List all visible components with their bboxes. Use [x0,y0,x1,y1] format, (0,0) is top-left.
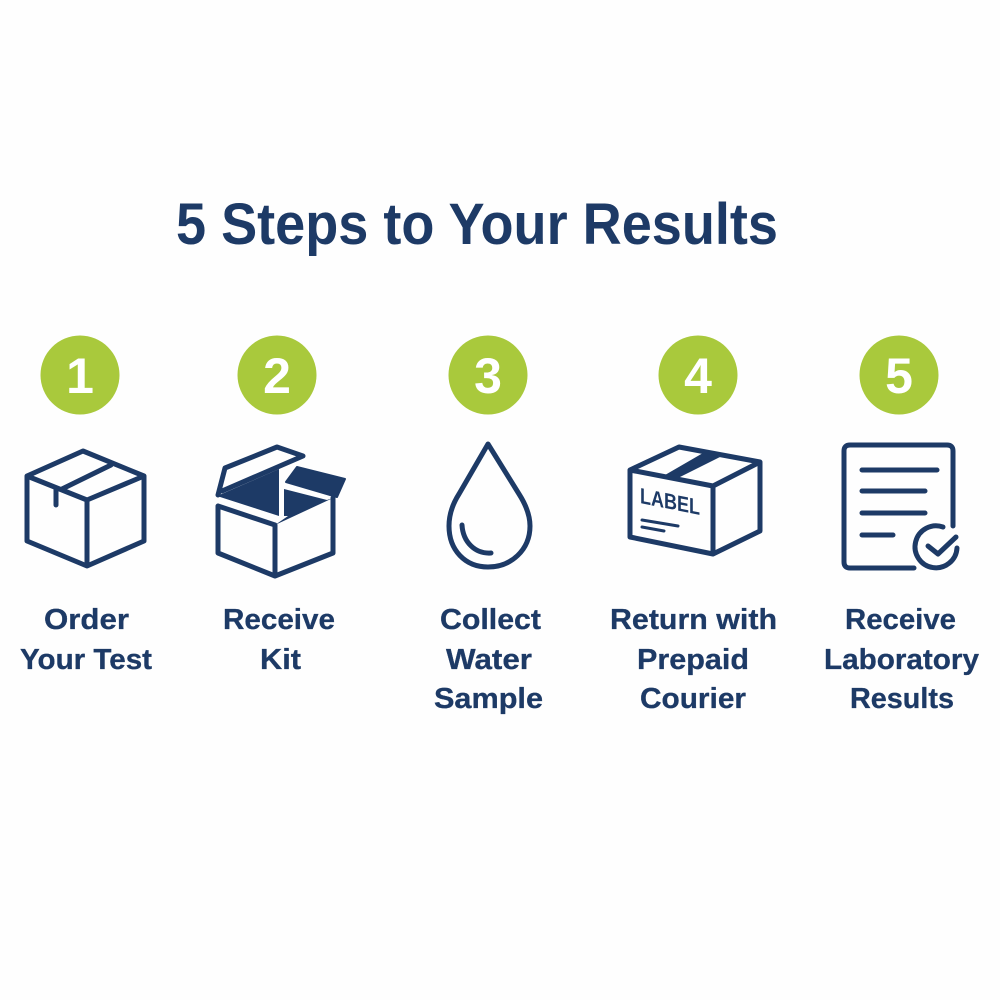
icon: water drop [449,444,530,567]
label: Collect Water Sample [434,604,543,715]
step 4 [610,336,777,715]
label: Collect Water Sample: Collect [440,604,541,636]
title: 5 Steps to Your Results [176,192,778,257]
step 1 [20,336,152,676]
number badge 2 [238,336,316,414]
icon: open box [217,447,345,576]
label: Collect Water Sample: Sample [434,683,543,715]
number badge 3: 3 [474,348,502,404]
label: Order Your Test: Order [44,604,129,636]
number badge 1 [40,336,120,414]
label: Receive Kit [223,604,335,676]
label: Receive Laboratory Results: Laboratory [824,644,979,676]
icon: labelled box: LABEL [640,483,700,520]
label: Return with Prepaid Courier: Return with [610,604,777,636]
label: Collect Water Sample: Water [446,644,532,676]
label: Return with Prepaid Courier: Prepaid [637,644,749,676]
number badge 3 [448,336,528,414]
number badge 5 [860,336,938,414]
label: Receive Laboratory Results: Results [850,683,954,715]
label: Receive Kit: Kit [260,644,301,676]
label: Receive Laboratory Results [824,604,979,715]
label: Order Your Test [20,604,152,676]
step 2 [217,336,345,676]
icon: results document with check [844,445,957,568]
label: Return with Prepaid Courier [610,604,777,715]
number badge 4 [658,336,738,414]
number badge 5: 5 [885,348,913,404]
label: Return with Prepaid Courier: Courier [640,683,746,715]
step 5 [824,336,979,715]
icon: closed box [27,451,144,566]
number badge 2: 2 [263,348,291,404]
label: Receive Laboratory Results: Receive [845,604,956,636]
number badge 4: 4 [684,348,712,404]
label: Receive Kit: Receive [223,604,335,636]
label: Order Your Test: Your Test [20,644,152,676]
step 3 [434,336,543,715]
icon: labelled box [630,447,760,554]
number badge 1: 1 [66,348,94,404]
